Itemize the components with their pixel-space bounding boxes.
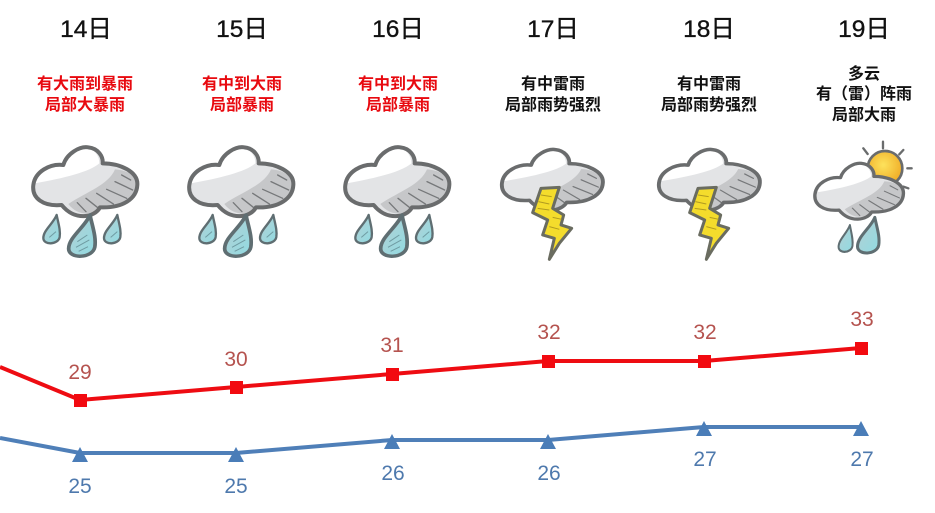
line chart: high temperature: 30: [224, 348, 248, 371]
line chart: low temperature: 25: [224, 475, 248, 498]
heading: 15日: 15日: [216, 16, 268, 43]
forecast text: 15日: [202, 75, 282, 114]
forecast text: 19日: 局部大雨: [832, 105, 896, 124]
line chart: low temperature: [0, 421, 874, 498]
line chart: high temperature: 29: [68, 361, 92, 384]
forecast text: 17日: 局部雨势强烈: [505, 95, 601, 114]
forecast text: 19日: [816, 64, 912, 124]
heading: 19日: 19日: [838, 16, 890, 43]
icon: thunderstorm 18日: [659, 149, 760, 259]
forecast text: 14日: 有大雨到暴雨: [37, 75, 133, 93]
heading: 18日: 18日: [683, 16, 735, 43]
forecast text: 17日: [505, 75, 601, 114]
line chart: high temperature: 32: [537, 321, 561, 344]
forecast text: 16日: 有中到大雨: [358, 75, 438, 93]
forecast text: 19日: 有（雷）阵雨: [816, 85, 912, 103]
line chart: low temperature: 26: [537, 462, 561, 485]
forecast text: 18日: 有中雷雨: [677, 75, 741, 93]
forecast text: 16日: 局部暴雨: [366, 95, 430, 114]
line chart: high temperature: 33: [850, 308, 874, 331]
forecast text: 18日: [661, 75, 757, 114]
heading: 14日: 14日: [60, 16, 112, 43]
forecast text: 17日: 有中雷雨: [521, 75, 585, 93]
forecast text: 18日: 局部雨势强烈: [661, 95, 757, 114]
line chart: low temperature: 27: [850, 448, 874, 471]
icon: heavy rain 16日: [345, 147, 449, 256]
icon: sun, cloud and showers 19日: [815, 142, 912, 253]
forecast text: 19日: 多云: [848, 64, 880, 83]
forecast text: 14日: [37, 75, 133, 114]
line chart: high temperature: 32: [693, 321, 717, 344]
icon: thunderstorm 17日: [502, 149, 603, 259]
line chart: low temperature: 26: [381, 462, 405, 485]
line chart: high temperature: [0, 308, 874, 407]
icon: heavy rain 14日: [33, 147, 137, 256]
forecast text: 15日: 局部暴雨: [210, 95, 274, 114]
forecast text: 15日: 有中到大雨: [202, 75, 282, 93]
line chart: high temperature: 31: [380, 334, 404, 357]
line chart: low temperature: 27: [693, 448, 717, 471]
icon: heavy rain 15日: [189, 147, 293, 256]
line chart: low temperature: 25: [68, 475, 92, 498]
forecast text: 14日: 局部大暴雨: [45, 95, 125, 114]
heading: 16日: 16日: [372, 16, 424, 43]
forecast text: 16日: [358, 75, 438, 114]
heading: 17日: 17日: [527, 16, 579, 43]
